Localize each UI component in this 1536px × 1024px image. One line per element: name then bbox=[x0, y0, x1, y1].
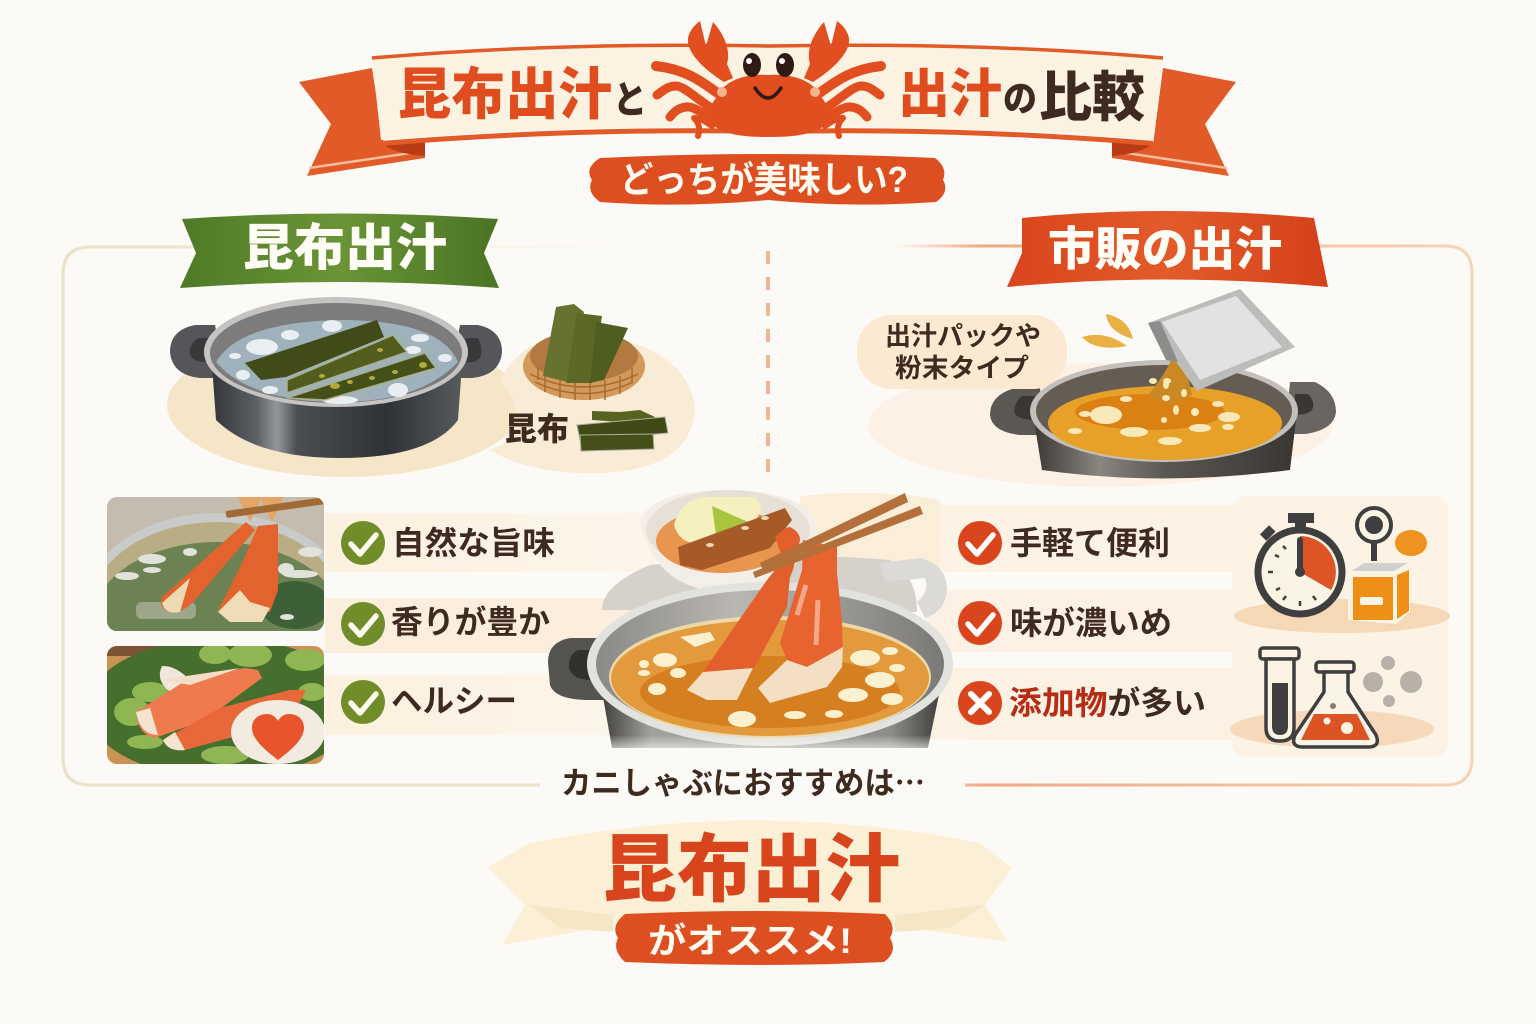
heading: store-bought dashi bbox=[1007, 211, 1328, 287]
title text right: 比較 bbox=[1039, 68, 1145, 128]
ribbon bottom edge line bbox=[381, 128, 1153, 146]
label: kombu: 昆布 bbox=[505, 411, 569, 447]
icon: crab mascot bbox=[656, 21, 881, 137]
chopsticks bbox=[753, 493, 923, 578]
back pot bbox=[602, 556, 947, 618]
pot body bbox=[212, 365, 462, 458]
heading: store-bought dashi: 市販の出汁 bbox=[1048, 223, 1282, 275]
callout: dashi pack or powder: 粉末タイプ bbox=[895, 353, 1029, 383]
callout: dashi pack or powder bbox=[857, 315, 1067, 389]
recommendation pill bbox=[615, 911, 893, 965]
benefit list: store-bought bbox=[958, 521, 1206, 725]
orange dot bbox=[1395, 530, 1427, 556]
soup bits bbox=[1068, 396, 1240, 445]
crab leg left bbox=[687, 527, 800, 700]
title text right: の bbox=[1003, 78, 1037, 119]
dashi packet bbox=[1148, 289, 1295, 391]
additive particles bbox=[1363, 656, 1422, 707]
benefit list: kombu bbox=[341, 521, 555, 724]
point: strong flavour: 味が濃いめ bbox=[1010, 605, 1172, 641]
warm strip behind centre bowl bbox=[800, 493, 940, 572]
splash drops bbox=[1082, 314, 1133, 348]
point: strong flavour bbox=[958, 601, 1172, 645]
main recommendation text: 昆布出汁 bbox=[603, 828, 900, 911]
recommendation lead text: カニしゃぶにおすすめは… bbox=[561, 758, 925, 803]
benefit: healthy bbox=[341, 680, 517, 724]
title text left: と bbox=[613, 80, 647, 122]
soup bbox=[609, 616, 931, 738]
photo: crab in kombu broth bbox=[107, 497, 324, 631]
pill text: がオススメ! bbox=[648, 922, 852, 961]
illustration: kombu pot bbox=[167, 297, 523, 477]
soup bbox=[1048, 386, 1282, 460]
pot body bbox=[600, 680, 942, 748]
title text right bbox=[898, 66, 1145, 128]
title text left: 昆布出汁 bbox=[398, 63, 612, 126]
benefit: rich aroma: 香りが豊か bbox=[391, 604, 550, 640]
title text right: 出汁 bbox=[898, 66, 1002, 124]
dried kombu in basket bbox=[543, 304, 628, 383]
foam bubbles bbox=[229, 320, 452, 404]
magnifier stand bbox=[1357, 508, 1391, 564]
icon: heart bbox=[252, 714, 304, 760]
heading: kombu dashi bbox=[180, 214, 499, 288]
ribbon top edge line bbox=[372, 45, 1163, 58]
mask below pot bbox=[540, 756, 960, 806]
heading: kombu dashi: 昆布出汁 bbox=[243, 220, 447, 276]
right ribbon tail bbox=[1112, 68, 1236, 176]
soup bubbles and tofu bbox=[638, 632, 905, 727]
point: many additives bbox=[958, 681, 1206, 725]
comparison panel frame left solid bbox=[63, 247, 540, 785]
callout: dashi pack or powder: 出汁パックや bbox=[885, 321, 1041, 351]
benefit: rich aroma bbox=[341, 602, 550, 646]
benefit: natural umami: 自然な旨味 bbox=[392, 525, 555, 561]
pot rim bbox=[1030, 360, 1298, 462]
illustration: kombu basket bbox=[490, 304, 695, 473]
powder stream bbox=[1148, 358, 1199, 423]
ribbon folds bbox=[530, 905, 985, 932]
recommendation banner bbox=[488, 820, 1012, 965]
comparison panel frame left bbox=[63, 247, 635, 785]
cream ribbon bbox=[488, 820, 1012, 945]
beige circle backdrop bbox=[490, 333, 695, 473]
pot body bbox=[1034, 420, 1296, 478]
point: easy and convenient: 手軽て便利 bbox=[1010, 525, 1170, 561]
centre dashed divider bbox=[766, 251, 770, 472]
crab leg right bbox=[758, 540, 843, 703]
point: easy and convenient bbox=[958, 521, 1170, 565]
side bowl bbox=[640, 490, 817, 592]
stopwatch bbox=[1258, 513, 1342, 614]
benefit: healthy: ヘルシー bbox=[391, 683, 517, 719]
icon: test tube and flask bbox=[1230, 648, 1434, 748]
ribbon folds bbox=[381, 140, 1154, 156]
right panel backgrounds bbox=[920, 496, 1448, 757]
pot rim bbox=[587, 582, 953, 746]
dashi box bbox=[1348, 561, 1410, 624]
benefit: natural umami bbox=[341, 521, 555, 565]
comparison panel frame right bbox=[895, 246, 1472, 785]
kombu pieces bbox=[577, 410, 668, 451]
pot handles bbox=[990, 382, 1336, 435]
test tube bbox=[1260, 648, 1299, 741]
basket bbox=[523, 332, 645, 400]
basket weave bbox=[530, 366, 638, 400]
pot handle bbox=[548, 638, 610, 700]
tail highlight stripes bbox=[309, 151, 1227, 168]
kombu strips in water bbox=[245, 320, 436, 400]
pot rim and interior bbox=[204, 297, 468, 407]
fade out bottom of pot bbox=[540, 735, 970, 757]
left benefit row backgrounds bbox=[325, 513, 655, 735]
flask bbox=[1294, 662, 1377, 747]
pot handles bbox=[170, 325, 502, 378]
ribbon main band bbox=[372, 45, 1163, 140]
left ribbon tail bbox=[299, 68, 425, 176]
point: many additives: 添加物が多い bbox=[1009, 685, 1206, 721]
illustration: centre hot pot bbox=[540, 490, 970, 757]
photo: crab legs on greens with heart bbox=[107, 646, 324, 764]
icon: stopwatch and dashi box bbox=[1234, 508, 1450, 633]
water bbox=[216, 320, 458, 402]
beige ground shadow bbox=[167, 333, 523, 477]
subtitle pill: どっちが美味しい? bbox=[620, 159, 908, 200]
pale ground shadow bbox=[868, 363, 1332, 487]
title banner bbox=[299, 21, 1236, 176]
illustration: dashi pack pot bbox=[868, 289, 1336, 487]
